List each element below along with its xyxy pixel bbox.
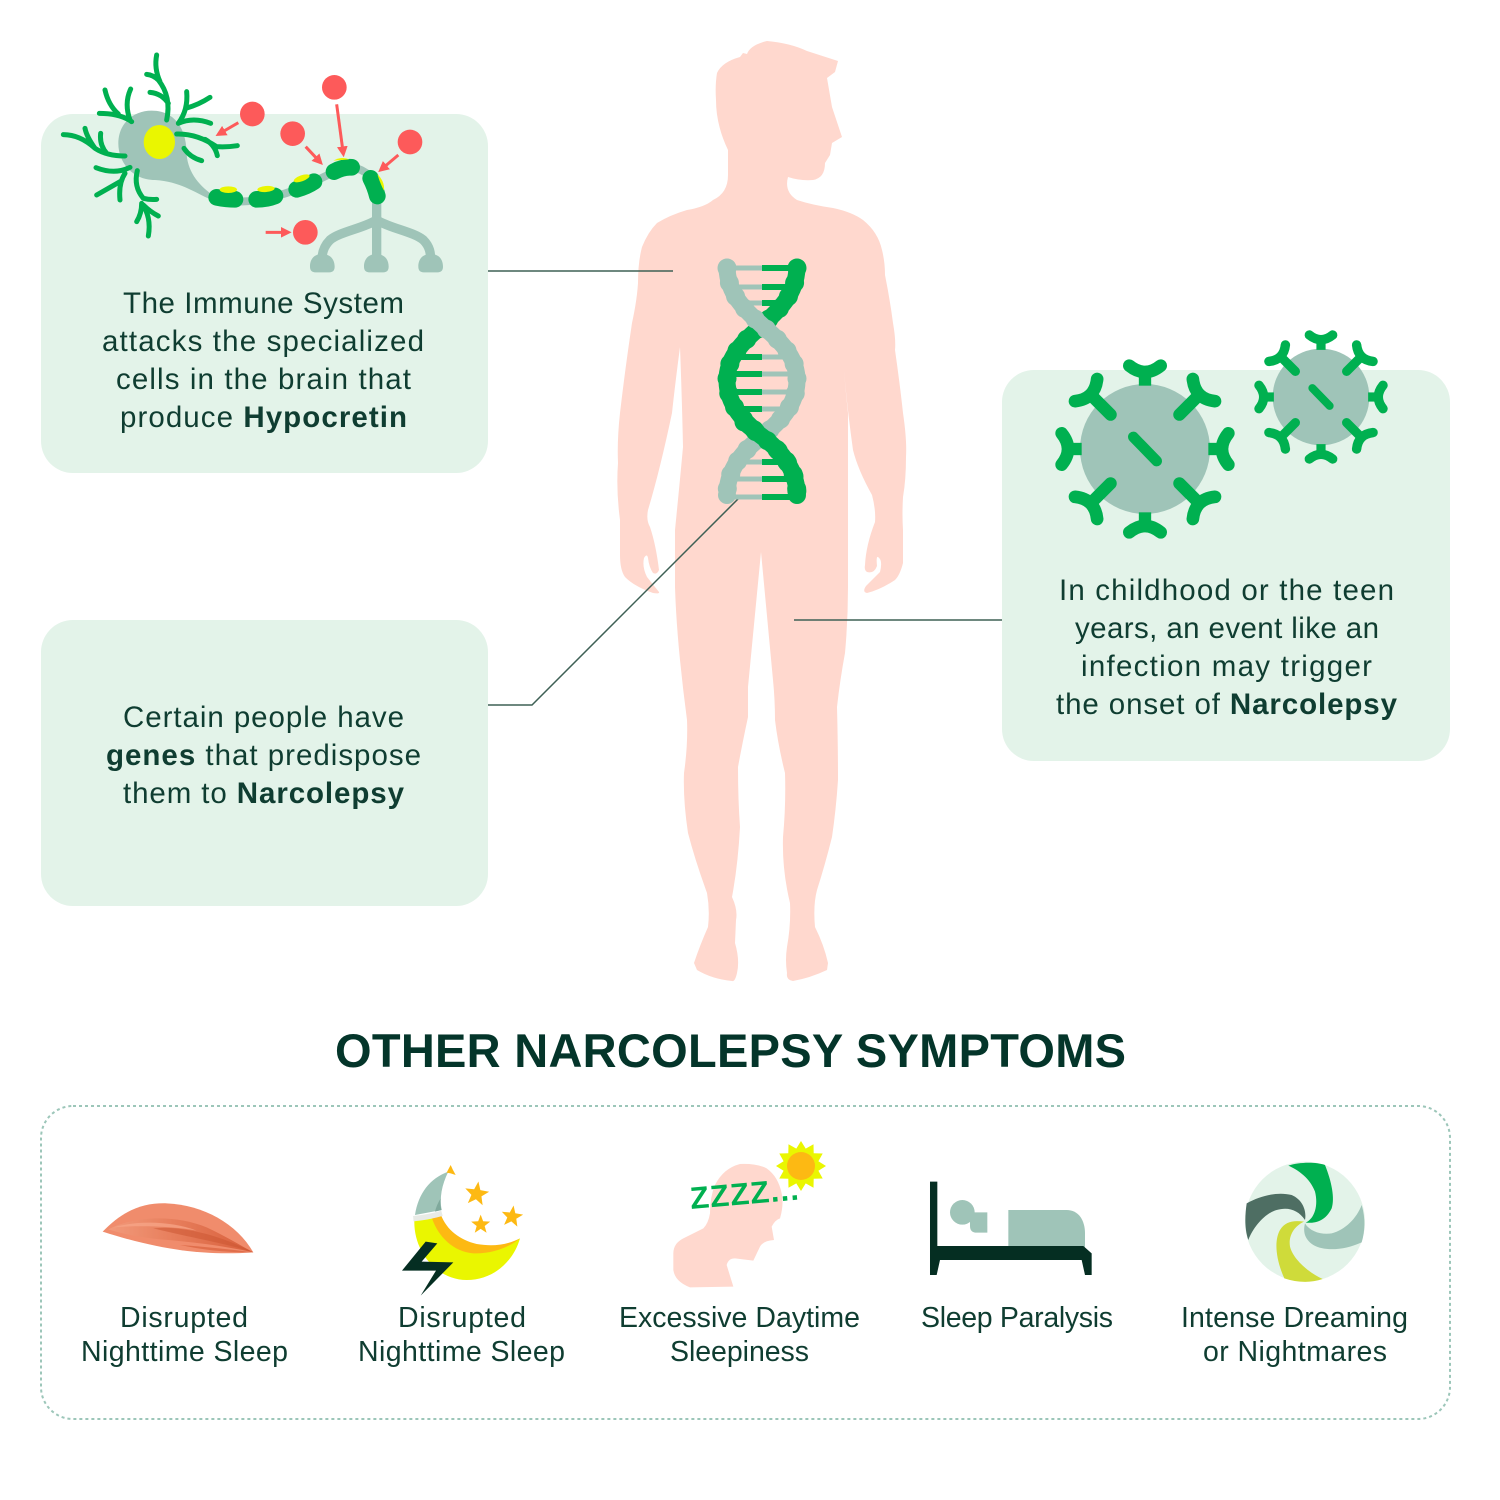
label: excessive daytime sleepiness: Excessive Daytime (619, 1302, 860, 1334)
label: disrupted nighttime sleep 2 (358, 1302, 565, 1368)
panel: immune system background (41, 114, 488, 473)
connector: genes to DNA (488, 496, 741, 705)
label: disrupted nighttime sleep 2: Disrupted (398, 1302, 526, 1334)
text: immune system: cells in the brain that (116, 363, 411, 396)
label: disrupted nighttime sleep 1: Nighttime Sleep (81, 1336, 288, 1368)
label: sleep paralysis: Sleep Paralysis (921, 1302, 1113, 1334)
icon: dream swirl (1245, 1162, 1365, 1282)
label: disrupted nighttime sleep 1: Disrupted (120, 1302, 248, 1334)
human body silhouette (617, 41, 906, 981)
heading: other symptoms: OTHER NARCOLEPSY SYMPTOMS (335, 1024, 1126, 1077)
text: genes: them to Narcolepsy (123, 777, 405, 810)
connector: immune system to body (488, 270, 673, 272)
icon: muscle (103, 1203, 253, 1253)
text: infection: infection may trigger (1081, 650, 1372, 683)
icon: moon with nightcap and lightning (402, 1165, 524, 1296)
icon: bed with sleeper (930, 1182, 1092, 1275)
label: intense dreaming or nightmares: or Nightmares (1203, 1336, 1387, 1368)
text: genes: genes that predispose (106, 739, 421, 772)
text: immune system: The Immune System (123, 287, 404, 320)
text: immune system: attacks the specialized (102, 325, 424, 358)
panel: infection background (1002, 370, 1450, 761)
icon: small virus (1259, 335, 1383, 459)
label: disrupted nighttime sleep 2: Nighttime Sleep (358, 1336, 565, 1368)
connector: infection to body (794, 619, 1002, 621)
icon: sleepy head with sun (673, 1141, 826, 1287)
label: intense dreaming or nightmares: Intense Dreaming (1181, 1302, 1408, 1334)
text: infection: years, an event like an (1075, 612, 1379, 645)
label: excessive daytime sleepiness (619, 1302, 860, 1368)
text: infection: the onset of Narcolepsy (1056, 688, 1398, 721)
text: genes (106, 701, 421, 810)
text: immune system (102, 287, 424, 434)
text: infection: In childhood or the teen (1059, 574, 1394, 607)
text: genes: Certain people have (123, 701, 404, 734)
text: immune system: produce Hypocretin (120, 401, 407, 434)
panel: genes background (41, 620, 488, 906)
label: intense dreaming or nightmares (1181, 1302, 1408, 1368)
panel: symptoms dashed frame (41, 1106, 1450, 1419)
icon: large virus (1062, 366, 1228, 532)
text: infection (1056, 574, 1398, 721)
label: excessive daytime sleepiness: Sleepiness (670, 1336, 809, 1368)
icon: neuron under attack (63, 55, 443, 272)
label: disrupted nighttime sleep 1 (81, 1302, 288, 1368)
DNA helix (718, 259, 806, 504)
icon: sleepy head with sun: ZZZZ... (689, 1172, 801, 1216)
